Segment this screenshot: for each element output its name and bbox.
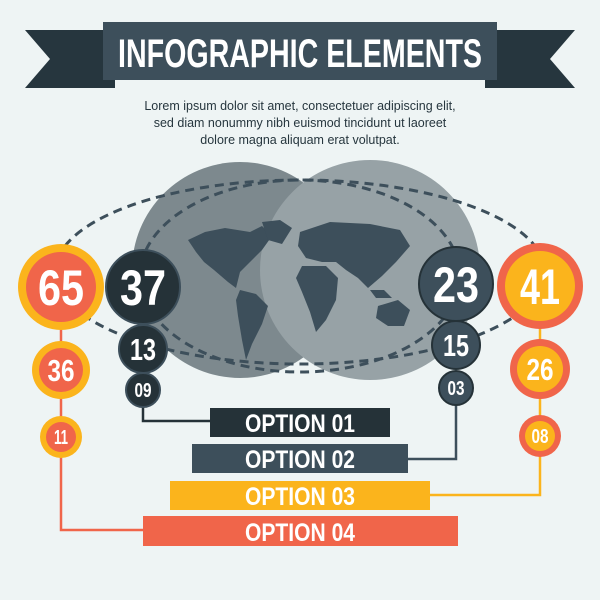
- right yellow circles: 41: [520, 259, 560, 315]
- world map: [188, 220, 410, 360]
- left column red circles: 65: [38, 260, 84, 316]
- text: 03: [448, 378, 464, 400]
- subtitle text: sed diam nonummy nibh euismod tincidunt ut laoreet: [154, 116, 447, 130]
- text: 13: [130, 332, 156, 367]
- left dark circles: [106, 250, 180, 407]
- right yellow circles: 08: [532, 426, 548, 448]
- left column red circles: 36: [48, 353, 74, 388]
- right yellow circles: [497, 243, 583, 457]
- option 01: [210, 408, 390, 438]
- option 03: [170, 481, 430, 511]
- text: 09: [134, 380, 152, 402]
- right slate circles: [419, 247, 493, 405]
- connector lines: [61, 286, 540, 530]
- title banner: [25, 22, 575, 88]
- subtitle text: Lorem ipsum dolor sit amet, consectetuer adipiscing elit,: [144, 99, 456, 113]
- option 03: OPTION 03: [245, 483, 355, 511]
- right yellow circles: 26: [526, 352, 554, 387]
- globe circles: [132, 160, 480, 380]
- option 02: OPTION 02: [245, 446, 355, 474]
- dashed orbits: [55, 180, 545, 372]
- text: 23: [433, 257, 479, 313]
- option 02: [192, 444, 408, 474]
- left column red circles: 11: [54, 427, 68, 449]
- subtitle text: dolore magna aliquam erat volutpat.: [200, 133, 400, 147]
- subtitle text: [144, 99, 456, 147]
- option 01: OPTION 01: [245, 410, 355, 438]
- left column red circles: [18, 244, 104, 458]
- option 04: OPTION 04: [245, 519, 355, 547]
- text: 37: [120, 260, 166, 316]
- text: 15: [443, 328, 469, 363]
- option 04: [143, 516, 458, 547]
